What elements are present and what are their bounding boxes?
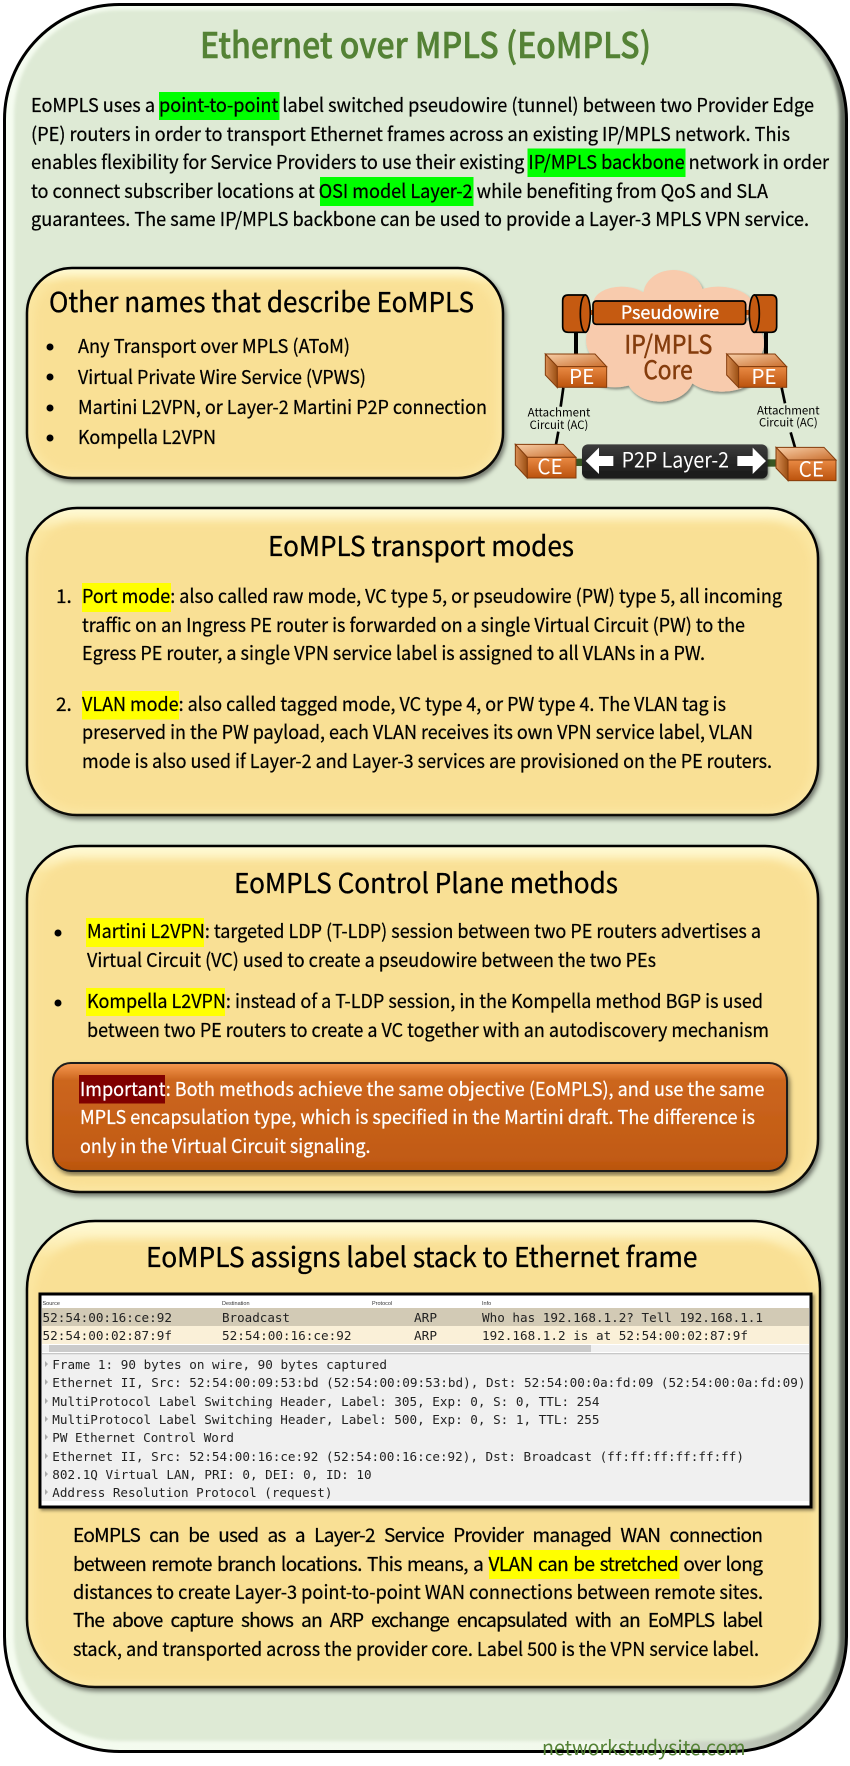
list: other names: Kompella L2VPN: [78, 423, 216, 450]
label: attachment circuit right: Attachment: [757, 402, 820, 418]
capture table header: Source: [42, 1301, 60, 1307]
mode 2: VLAN mode: mode is also used if Layer-2 and Layer-3 services are provisioned on the PE routers.: [82, 747, 772, 774]
mode 1: port mode: [56, 582, 782, 666]
text block: introduction: (PE) routers in order to transport Ethernet frames across an existing IP/MPLS network. This: [31, 120, 790, 147]
method: Kompella L2VPN: between two PE routers to create a VC together with an autodiscovery mechanism: [87, 1016, 769, 1043]
capture packet details: PW Ethernet Control Word: [52, 1430, 234, 1445]
pseudowire bar: Pseudowire: [621, 299, 719, 325]
text block: introduction: EoMPLS uses a point-to-point label switched pseudowire (tunnel) between two Provider Edge: [31, 91, 814, 118]
capture table header: Destination: [222, 1301, 250, 1307]
mode 2: VLAN mode: [56, 690, 772, 774]
callout: important: MPLS encapsulation type, which is specified in the Martini draft. The difference is: [80, 1103, 755, 1130]
icon: PE router right: PE: [751, 360, 777, 390]
text block: label stack explanation: distances to create Layer-3 point-to-point WAN connections between remote sites.: [73, 1578, 763, 1605]
capture packet details: MultiProtocol Label Switching Header, Label: 305, Exp: 0, S: 0, TTL: 254: [52, 1394, 600, 1409]
label: attachment circuit right: Circuit (AC): [759, 415, 818, 431]
icon: CE router left: [515, 444, 576, 480]
mode 1: port mode: Port mode: also called raw mode, VC type 5, or pseudowire (PW) type 5, all incoming: [82, 582, 782, 609]
method: Martini L2VPN: Martini L2VPN: targeted LDP (T-LDP) session between two PE routers advertises a: [87, 917, 761, 944]
capture row 2: 52:54:00:16:ce:92: [222, 1328, 352, 1343]
icon: CE router right: CE: [799, 453, 824, 483]
mode 1: port mode: Egress PE router, a single VPN service label is assigned to all VLANs in a PW.: [82, 639, 705, 666]
text block: label stack explanation: between remote branch locations. This means, a VLAN can be stretched over long: [73, 1550, 763, 1577]
panel: other names: [27, 268, 503, 478]
cloud label: [624, 325, 712, 387]
callout: important: only in the Virtual Circuit signaling.: [80, 1132, 370, 1159]
cloud label: Core: [643, 351, 693, 387]
panel: transport modes: [27, 508, 818, 815]
heading: other names: Other names that describe EoMPLS: [49, 280, 474, 320]
capture row 1: ARP: [414, 1310, 437, 1325]
capture table header: Info: [482, 1301, 491, 1307]
text block: introduction: guarantees. The same IP/MPLS backbone can be used to provide a Layer-3 MPLS VPN service.: [31, 205, 809, 232]
heading: transport modes: EoMPLS transport modes: [268, 524, 574, 564]
heading: label stack: EoMPLS assigns label stack to Ethernet frame: [146, 1235, 698, 1275]
icon: PE router left: PE: [569, 360, 594, 390]
method: Kompella L2VPN: Kompella L2VPN: instead of a T-LDP session, in the Kompella method BGP is used: [87, 987, 763, 1014]
diagram: EoMPLS pseudowire topology: [515, 270, 836, 483]
text block: introduction: enables flexibility for Service Providers to use their existing IP/MPLS backbone network in order: [31, 148, 830, 175]
text block: label stack explanation: The above capture shows an ARP exchange encapsulated with an EoMPLS label: [73, 1606, 763, 1633]
text block: introduction: [31, 91, 830, 232]
icon: left tunnel end: [563, 295, 594, 332]
heading: control plane methods: EoMPLS Control Plane methods: [234, 861, 618, 901]
method: Kompella L2VPN: [54, 987, 769, 1043]
label: attachment circuit right: [757, 402, 820, 431]
text block: introduction: to connect subscriber locations at OSI model Layer-2 while benefiting from QoS and SLA: [31, 177, 768, 204]
callout: important: [53, 1063, 787, 1171]
P2P Layer-2 bar with arrows: P2P Layer-2: [622, 444, 729, 475]
icon: right tunnel end: [745, 295, 777, 332]
label: attachment circuit left: Attachment: [528, 405, 591, 421]
capture packet details: Address Resolution Protocol (request): [52, 1485, 332, 1500]
capture packet details: [42, 1355, 809, 1501]
icon: PE router right: [727, 354, 787, 390]
label: attachment circuit left: [528, 405, 591, 433]
callout: important: Important: Both methods achieve the same objective (EoMPLS), and use the same: [80, 1075, 764, 1102]
mode 2: VLAN mode: preserved in the PW payload, each VLAN receives its own VPN service label, VLAN: [82, 718, 753, 745]
capture row 2: 192.168.1.2 is at 52:54:00:02:87:9f: [482, 1328, 748, 1343]
customer links: [575, 459, 777, 467]
capture packet details: MultiProtocol Label Switching Header, Label: 500, Exp: 0, S: 1, TTL: 255: [52, 1412, 600, 1427]
mode 2: VLAN mode: 2.: [56, 690, 72, 717]
capture packet details: Frame 1: 90 bytes on wire, 90 bytes captured: [52, 1357, 387, 1372]
capture row 2: 52:54:00:02:87:9f: [42, 1328, 172, 1343]
title: Ethernet over MPLS (EoMPLS): [200, 18, 651, 69]
list: other names: Virtual Private Wire Service (VPWS): [78, 363, 366, 390]
icon: CE router right: [776, 447, 836, 483]
text block: label stack explanation: EoMPLS can be used as a Layer-2 Service Provider managed WAN connection: [73, 1521, 763, 1548]
capture scrollbar: [42, 1345, 809, 1354]
capture table header: Protocol: [372, 1301, 392, 1307]
capture packet details: Ethernet II, Src: 52:54:00:16:ce:92 (52:54:00:16:ce:92), Dst: Broadcast (ff:ff:ff:ff:ff:ff): [52, 1449, 744, 1464]
capture packet details: 802.1Q Virtual LAN, PRI: 0, DEI: 0, ID: 10: [52, 1467, 372, 1482]
method: Martini L2VPN: Virtual Circuit (VC) used to create a pseudowire between the two PEs: [87, 946, 656, 973]
panel: control plane methods: [27, 846, 818, 1192]
panel: label stack: [27, 1221, 820, 1687]
capture row 2: ARP: [414, 1328, 437, 1343]
packet capture: [40, 1294, 811, 1507]
mode 2: VLAN mode: VLAN mode: also called tagged mode, VC type 4, or PW type 4. The VLAN tag is: [82, 690, 726, 717]
capture row 1: [42, 1308, 809, 1326]
capture packet details: Ethernet II, Src: 52:54:00:09:53:bd (52:54:00:09:53:bd), Dst: 52:54:00:0a:fd:09 (52:54:00:0a:fd:09): [52, 1375, 806, 1390]
mode 1: port mode: traffic on an Ingress PE router is forwarded on a single Virtual Circuit (PW) to the: [82, 611, 745, 638]
label: attachment circuit left: Circuit (AC): [530, 417, 588, 433]
icon: PE router left: [545, 354, 607, 390]
pseudowire bar: [593, 299, 746, 325]
P2P Layer-2 bar with arrows: [582, 444, 768, 479]
list: other names: Martini L2VPN, or Layer-2 Martini P2P connection: [78, 393, 487, 420]
connectors: [556, 332, 795, 447]
text block: label stack explanation: [73, 1521, 763, 1662]
icon: CE router left: CE: [537, 450, 563, 480]
icon: IP/MPLS cloud: [582, 270, 764, 402]
cloud label: IP/MPLS: [624, 325, 712, 361]
mode 1: port mode: 1.: [56, 582, 72, 609]
text block: label stack explanation: stack, and transported across the provider core. Label 500 is the VPN service label.: [73, 1635, 759, 1662]
capture row 2: [42, 1326, 809, 1344]
capture table header: [42, 1301, 491, 1307]
capture row 1: Broadcast: [222, 1310, 290, 1325]
list: other names: Any Transport over MPLS (AToM): [78, 332, 350, 359]
list: other names: [46, 332, 487, 450]
capture row 1: Who has 192.168.1.2? Tell 192.168.1.1: [482, 1310, 763, 1325]
watermark: networkstudysite.com: [542, 1732, 746, 1761]
method: Martini L2VPN: [54, 917, 761, 973]
capture row 1: 52:54:00:16:ce:92: [42, 1310, 172, 1325]
